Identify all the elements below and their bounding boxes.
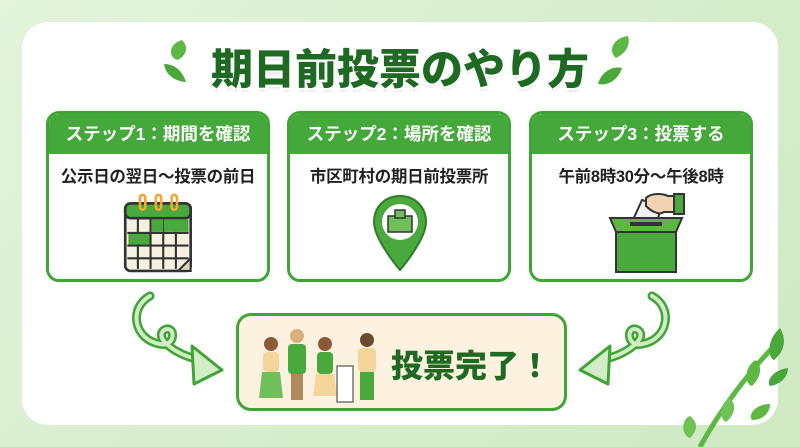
- callout: vote complete: [236, 313, 567, 411]
- illustration: voters: [259, 329, 376, 403]
- heading: step 3: ステップ3：投票する: [557, 124, 725, 144]
- arrow: left curl: [132, 292, 224, 386]
- panel: step 1: [46, 111, 270, 282]
- heading: step 2: ステップ2：場所を確認: [307, 124, 491, 144]
- heading: step 2: [290, 114, 508, 154]
- text: step 2 place: 市区町村の期日前投票所: [310, 168, 488, 186]
- heading: step 1: [49, 114, 267, 154]
- text: step 3 hours: 午前8時30分〜午後8時: [558, 168, 724, 186]
- icon: calendar: [124, 194, 192, 272]
- arrow: right curl: [578, 292, 670, 386]
- icon: location pin: [373, 195, 427, 272]
- icon: ballot box: [608, 193, 685, 273]
- icon: right leaves: [598, 36, 629, 84]
- panel: step 2: [287, 111, 511, 282]
- text: step 1 period: 公示日の翌日〜投票の前日: [61, 168, 255, 186]
- icon: left leaves: [164, 40, 186, 82]
- heading: step 3: [532, 114, 750, 154]
- panel: step 3: [529, 111, 753, 282]
- decoration: plant bottom right: [683, 328, 788, 447]
- heading: step 1: ステップ1：期間を確認: [66, 124, 250, 144]
- title: 期日前投票のやり方: [211, 46, 589, 93]
- text: vote complete: 投票完了！: [391, 348, 551, 384]
